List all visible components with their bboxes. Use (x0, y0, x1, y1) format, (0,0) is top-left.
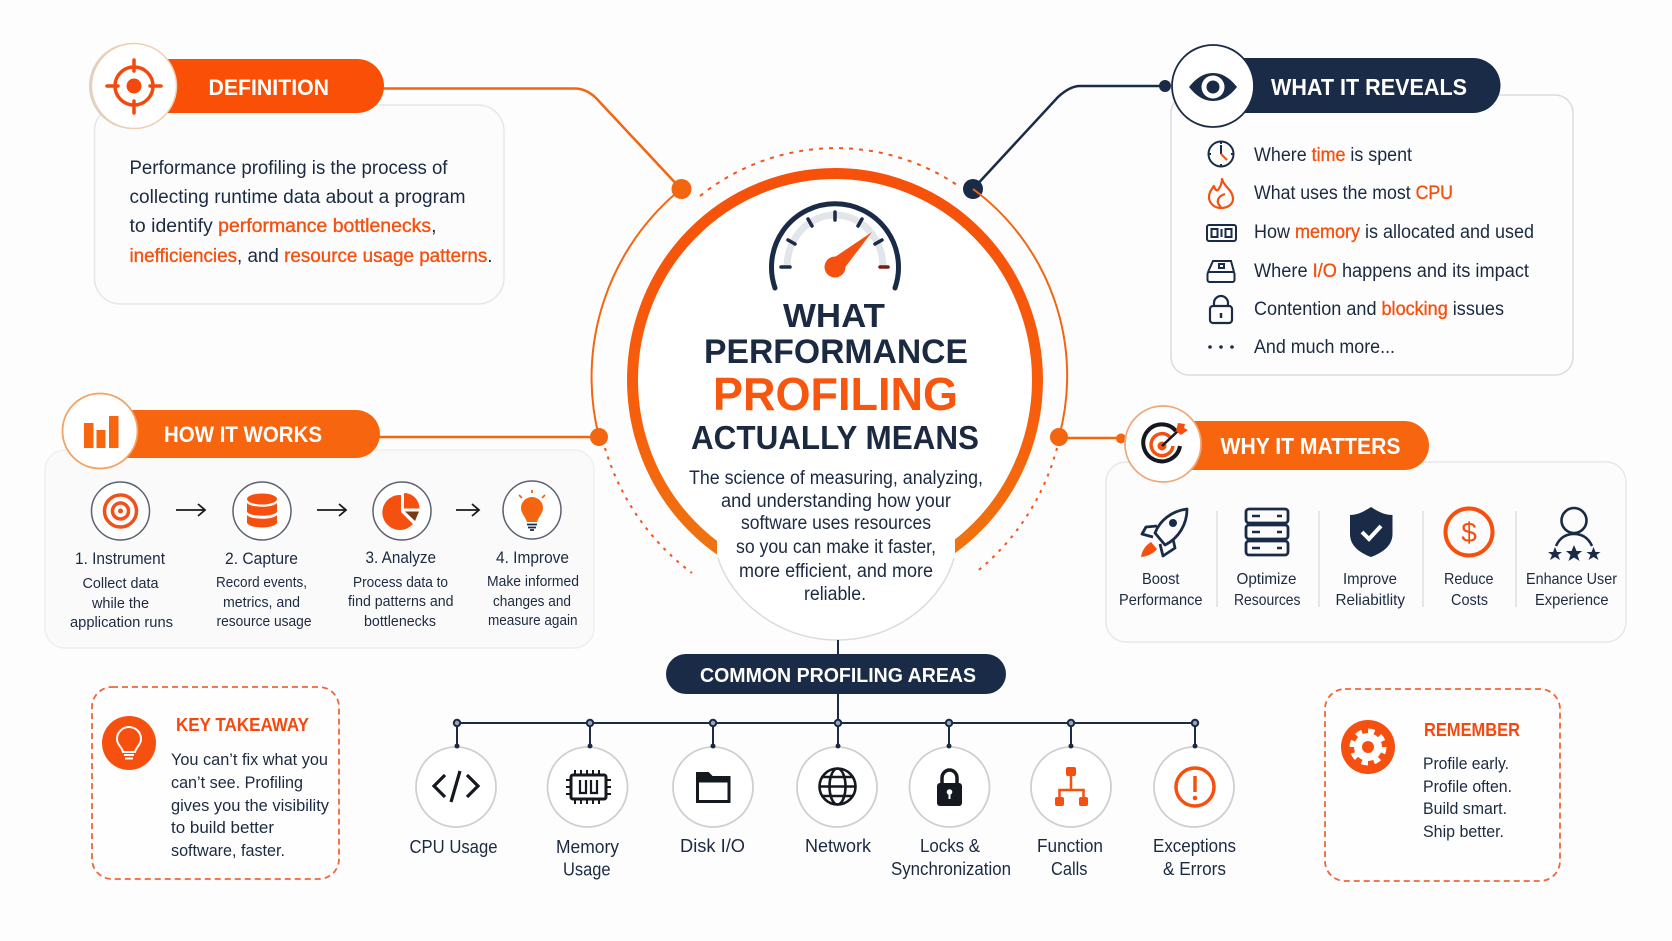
item: enhance user experience: Enhance User (1526, 571, 1618, 588)
panel: why it matters (1106, 406, 1626, 642)
icon: padlock (1210, 296, 1232, 323)
step: capture: Record events, (216, 575, 307, 591)
item: reduce costs (1444, 508, 1494, 609)
callout: key takeaway (92, 687, 339, 879)
callout: remember: Build smart. (1423, 799, 1507, 818)
icon: gear (1341, 720, 1395, 774)
area: locks and synchronization (891, 747, 1011, 879)
dividers (1217, 511, 1516, 607)
item: boost performance (1119, 509, 1203, 609)
area: disk i/o: Disk I/O (680, 836, 745, 856)
item: boost performance: Boost (1142, 571, 1180, 588)
icon: target with arrow (1125, 406, 1201, 482)
area: exceptions and errors: & Errors (1163, 859, 1226, 879)
item: optimize resources: Resources (1234, 592, 1300, 609)
step: analyze: bottlenecks (364, 614, 436, 630)
definition text (130, 158, 492, 267)
item: improve reliability: Reliabitlity (1336, 592, 1405, 609)
pill heading: WHY IT MATTERS (1220, 433, 1400, 459)
connector: why it matters to hub (1050, 428, 1126, 446)
connector: how it works to hub (375, 428, 608, 446)
item: enhance user experience: Experience (1535, 592, 1609, 609)
item: improve reliability (1336, 507, 1405, 609)
callout: key takeaway: You can’t fix what you (171, 750, 328, 769)
subtitle: software uses resources (741, 513, 931, 534)
icon: bar chart (62, 394, 138, 468)
area: memory usage (548, 747, 628, 880)
step: capture: resource usage (216, 614, 312, 630)
title: PERFORMANCE (704, 333, 968, 371)
main ring (632, 174, 1038, 586)
pill heading: HOW IT WORKS (164, 422, 322, 447)
pill heading: WHAT IT REVEALS (1271, 74, 1467, 100)
title: PROFILING (713, 368, 958, 420)
icon: memory module (1207, 225, 1236, 241)
step: improve: Make informed (487, 574, 579, 590)
area: cpu usage (410, 747, 498, 857)
area: exceptions and errors: Exceptions (1153, 836, 1236, 856)
heading: common profiling areas (666, 654, 1006, 694)
item: improve reliability: Improve (1343, 571, 1397, 588)
icon: clock (1208, 142, 1234, 166)
pill heading (1213, 58, 1500, 113)
list: what it reveals: What uses the most CPU (1254, 183, 1453, 204)
step: improve: measure again (488, 613, 578, 629)
subtitle: reliable. (804, 584, 866, 605)
list: what it reveals: Contention and blocking issues (1254, 299, 1504, 320)
icon: light bulb (102, 716, 156, 770)
area: function calls (1031, 747, 1111, 879)
area: exceptions and errors (1153, 747, 1236, 879)
pill heading (134, 59, 384, 113)
subtitle: and understanding how your (721, 491, 952, 512)
central hub (592, 148, 1067, 640)
callout: key takeaway: software, faster. (171, 841, 285, 860)
area: locks and synchronization: Locks & (920, 836, 980, 856)
area: disk i/o (673, 747, 753, 856)
definition text: inefficiencies, and resource usage patterns. (130, 246, 492, 267)
step: analyze: 3. Analyze (366, 549, 436, 567)
list: what it reveals: And much more... (1254, 337, 1395, 358)
item: reduce costs: Costs (1451, 592, 1488, 609)
icon: crosshair (89, 43, 176, 129)
connector: definition to hub (380, 88, 692, 199)
tree end dots (454, 744, 1198, 748)
area: memory usage: Memory (556, 837, 619, 857)
item: reduce costs: $ (1461, 517, 1477, 548)
step: improve: changes and (493, 594, 571, 610)
item: reduce costs: Reduce (1444, 571, 1494, 588)
callout: remember: Ship better. (1423, 822, 1504, 841)
panel: what it reveals (1171, 45, 1573, 375)
icon: eye (1172, 45, 1254, 127)
title: WHAT (783, 297, 885, 334)
pill heading (100, 410, 380, 458)
card (1106, 462, 1626, 642)
subtitle (689, 468, 983, 605)
step: improve: 4. Improve (496, 549, 569, 567)
list: what it reveals: How memory is allocated and used (1254, 222, 1534, 243)
subtitle: so you can make it faster, (736, 537, 936, 558)
callout: key takeaway: to build better (171, 818, 274, 837)
tree connectors (454, 640, 1198, 746)
card (45, 450, 594, 648)
definition text: to identify performance bottlenecks , (130, 216, 437, 237)
callout: key takeaway: KEY TAKEAWAY (176, 715, 309, 735)
step: instrument: application runs (70, 615, 173, 631)
card (94, 105, 504, 304)
definition text: collecting runtime data about a program (130, 187, 465, 208)
area: function calls: Calls (1051, 859, 1088, 879)
connector: what it reveals to hub (963, 80, 1171, 199)
icon: more dots (1208, 345, 1234, 349)
item: boost performance: Performance (1119, 592, 1203, 609)
item: enhance user experience (1526, 508, 1618, 609)
area: locks and synchronization: Synchronization (891, 859, 1011, 879)
callout: key takeaway: can’t see. Profiling (171, 773, 303, 792)
step: instrument (70, 482, 173, 631)
callout: remember: Profile early. (1423, 754, 1509, 773)
subtitle bubble (717, 512, 955, 640)
pill heading (1163, 421, 1429, 470)
list: what it reveals: Where I/O happens and its impact (1254, 261, 1530, 282)
arrow (456, 504, 479, 516)
list: what it reveals (1254, 145, 1534, 358)
arrow (176, 504, 205, 516)
panel: definition (89, 43, 504, 304)
subtitle: more efficient, and more (739, 561, 933, 582)
step: analyze: find patterns and (348, 594, 454, 610)
item: optimize resources (1234, 509, 1300, 609)
step: instrument: Collect data (82, 576, 159, 592)
area: cpu usage: CPU Usage (410, 837, 498, 857)
area: function calls: Function (1037, 836, 1103, 856)
step: capture (216, 482, 312, 630)
callout: remember: REMEMBER (1424, 720, 1520, 740)
definition text: Performance profiling is the process of (130, 158, 448, 179)
list: what it reveals: Where time is spent (1254, 145, 1413, 166)
callout: remember (1325, 689, 1560, 881)
icon: flame (1209, 179, 1233, 208)
icon: disk drive (1208, 261, 1234, 282)
title (691, 297, 979, 456)
area: memory usage: Usage (563, 860, 610, 880)
step: improve (487, 481, 579, 629)
callout: remember: Profile often. (1423, 777, 1512, 796)
arrow (317, 504, 346, 516)
title: ACTUALLY MEANS (691, 419, 979, 456)
step: capture: 2. Capture (225, 550, 298, 568)
step: instrument: 1. Instrument (75, 550, 165, 568)
heading: common profiling areas: COMMON PROFILING AREAS (700, 665, 976, 687)
outer arcs (592, 148, 1067, 573)
area: network (797, 747, 877, 856)
area: network: Network (805, 836, 872, 856)
item: optimize resources: Optimize (1236, 571, 1297, 588)
step: analyze: Process data to (353, 575, 448, 591)
card (1171, 95, 1573, 375)
step: instrument: while the (91, 596, 149, 612)
pill heading: DEFINITION (208, 75, 329, 100)
callout: key takeaway: gives you the visibility (171, 796, 329, 815)
subtitle: The science of measuring, analyzing, (689, 468, 983, 489)
step: analyze (348, 482, 454, 630)
step: capture: metrics, and (223, 595, 300, 611)
panel: how it works (45, 394, 594, 648)
icon: speedometer gauge (772, 204, 898, 288)
